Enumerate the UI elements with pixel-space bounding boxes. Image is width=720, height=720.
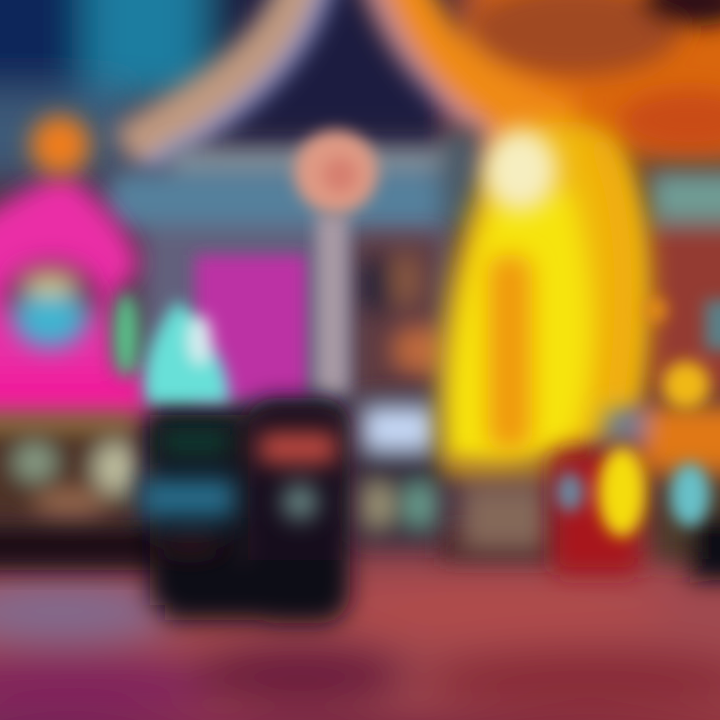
orange stripe bbox=[488, 140, 623, 450]
dark window bbox=[352, 235, 446, 400]
floor base bbox=[0, 698, 720, 720]
dark arcade machines bbox=[150, 398, 350, 623]
pink building bbox=[0, 176, 150, 418]
orange finial bbox=[30, 115, 90, 175]
wall band bbox=[105, 130, 720, 405]
dark base strip bbox=[0, 520, 560, 570]
floor bbox=[0, 550, 720, 720]
white top highlight bbox=[482, 128, 558, 212]
mint figure bbox=[113, 293, 229, 405]
ceiling arcs bbox=[125, 0, 720, 170]
booth under pink building bbox=[0, 414, 140, 522]
panel: magenta wall bbox=[195, 255, 307, 400]
lamp bbox=[294, 130, 378, 214]
ceiling background bbox=[0, 0, 720, 180]
machine details bbox=[140, 428, 338, 555]
pillar bbox=[316, 215, 348, 395]
right machine details bbox=[556, 298, 720, 537]
porthole bbox=[4, 262, 100, 348]
yellow arch bbox=[439, 121, 651, 469]
centre machine bbox=[358, 395, 440, 540]
base under arch bbox=[445, 462, 560, 550]
right small machines bbox=[552, 405, 720, 580]
